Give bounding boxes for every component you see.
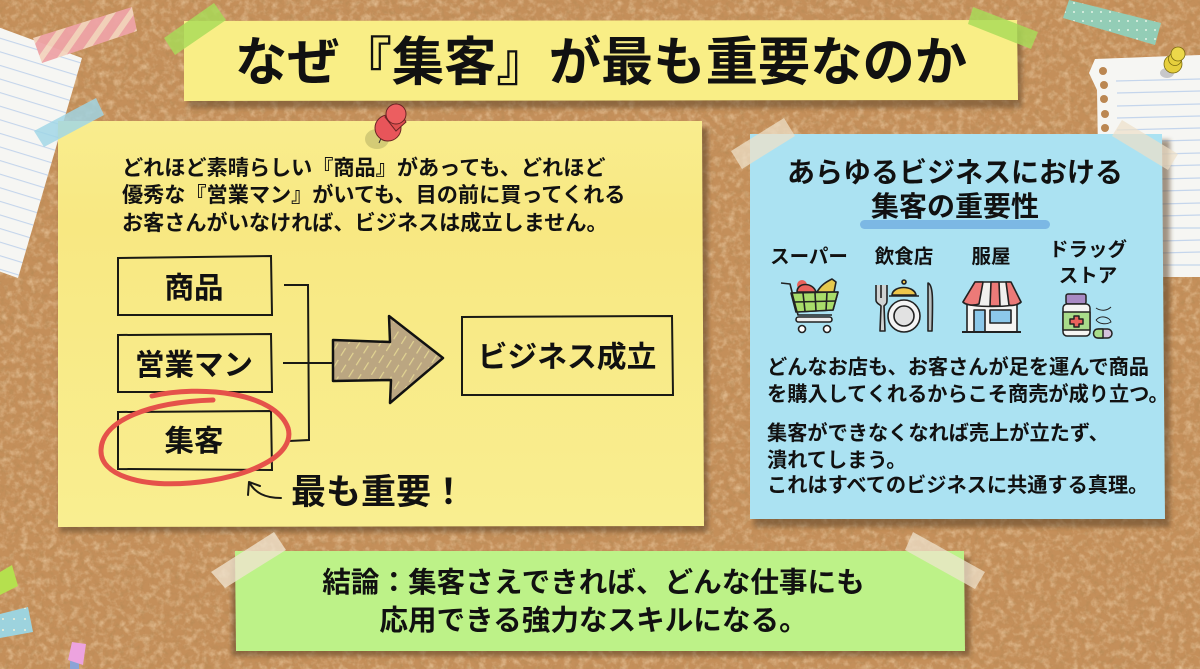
intro text: お客さんがいなければ、ビジネスは成立しません。 xyxy=(122,210,608,235)
title shadow xyxy=(188,28,1022,108)
conclusion text: 結論：集客さえできれば、どんな仕事にも xyxy=(322,567,865,599)
box: 営業マン: 営業マン xyxy=(135,349,253,382)
tape: green title right xyxy=(968,7,1038,49)
label: 飲食店: 飲食店 xyxy=(875,246,933,268)
icon: storefront xyxy=(962,282,1021,332)
body text 2 xyxy=(767,421,1148,497)
panel heading xyxy=(787,157,1123,229)
push pin: yellow xyxy=(1160,47,1185,78)
box: 商品: 商品 xyxy=(164,272,224,305)
label: ドラッグストア xyxy=(1049,238,1127,287)
label: 服屋: 服屋 xyxy=(971,246,1011,268)
intro text xyxy=(122,155,625,235)
tape: teal dotted xyxy=(1063,0,1161,45)
panel heading: 集客の重要性 xyxy=(871,191,1039,222)
icon: restaurant place setting xyxy=(876,280,933,332)
label: スーパー: スーパー xyxy=(770,246,848,268)
box: 集客 xyxy=(118,411,272,470)
body text 2: 集客ができなくなれば売上が立たず、 xyxy=(767,421,1109,445)
pink marker fragment bottom xyxy=(68,642,86,669)
arrow xyxy=(333,316,443,403)
intro text: どれほど素晴らしい『商品』があっても、どれほど xyxy=(122,155,605,180)
label: ドラッグストア: ストア xyxy=(1059,265,1117,287)
panel: conclusion xyxy=(235,551,965,651)
box: 商品 xyxy=(118,256,272,315)
label: ドラッグストア: ドラッグ xyxy=(1049,238,1127,261)
torn notebook paper, top left xyxy=(0,24,82,278)
box: 集客: 集客 xyxy=(164,425,224,458)
tape: lime fragment bottom left xyxy=(0,565,18,595)
small arrow xyxy=(248,482,281,498)
panel: importance across businesses xyxy=(750,134,1169,519)
box: ビジネス成立 xyxy=(462,316,673,395)
body text 2: これはすべてのビジネスに共通する真理。 xyxy=(767,474,1148,497)
label: 最も重要！: 最も重要！ xyxy=(291,473,466,512)
intro text: 優秀な『営業マン』がいても、目の前に買ってくれる xyxy=(122,182,625,207)
tape: beige right panel left xyxy=(731,118,795,169)
right panel shadow xyxy=(754,140,1170,527)
conclusion text: 応用できる強力なスキルになる。 xyxy=(379,605,808,637)
tape: pink striped xyxy=(33,7,137,63)
box: ビジネス成立: ビジネス成立 xyxy=(478,341,656,374)
bottom panel shadow xyxy=(232,558,970,656)
icon: shopping cart xyxy=(781,279,838,332)
box: 営業マン xyxy=(118,334,272,392)
left panel shadow xyxy=(60,128,708,532)
title note xyxy=(184,20,1018,101)
conclusion text xyxy=(322,567,865,637)
panel: why customer acquisition matters xyxy=(58,121,704,527)
tape: blue dotted fragment bottom left xyxy=(0,607,33,638)
notebook paper, top right xyxy=(1089,55,1200,277)
tape: green title left xyxy=(164,3,226,55)
tape: beige right panel right xyxy=(1112,120,1178,170)
panel heading: あらゆるビジネスにおける xyxy=(787,157,1123,188)
icon: medicine bottle and pills xyxy=(1063,294,1112,338)
body text 1 xyxy=(767,355,1169,406)
body text 2: 潰れてしまう。 xyxy=(767,449,906,472)
push pin: red xyxy=(365,104,406,149)
title text: なぜ『集客』が最も重要なのか xyxy=(235,34,967,92)
tape: beige bottom left xyxy=(211,532,286,588)
body text 1: どんなお店も、お客さんが足を運んで商品 xyxy=(767,355,1149,379)
tape: blue left panel xyxy=(34,98,104,147)
body text 1: を購入してくれるからこそ商売が成り立つ。 xyxy=(767,382,1169,406)
red circle highlight xyxy=(101,391,289,484)
tape: beige bottom right xyxy=(905,532,985,589)
bracket connector xyxy=(283,285,333,441)
